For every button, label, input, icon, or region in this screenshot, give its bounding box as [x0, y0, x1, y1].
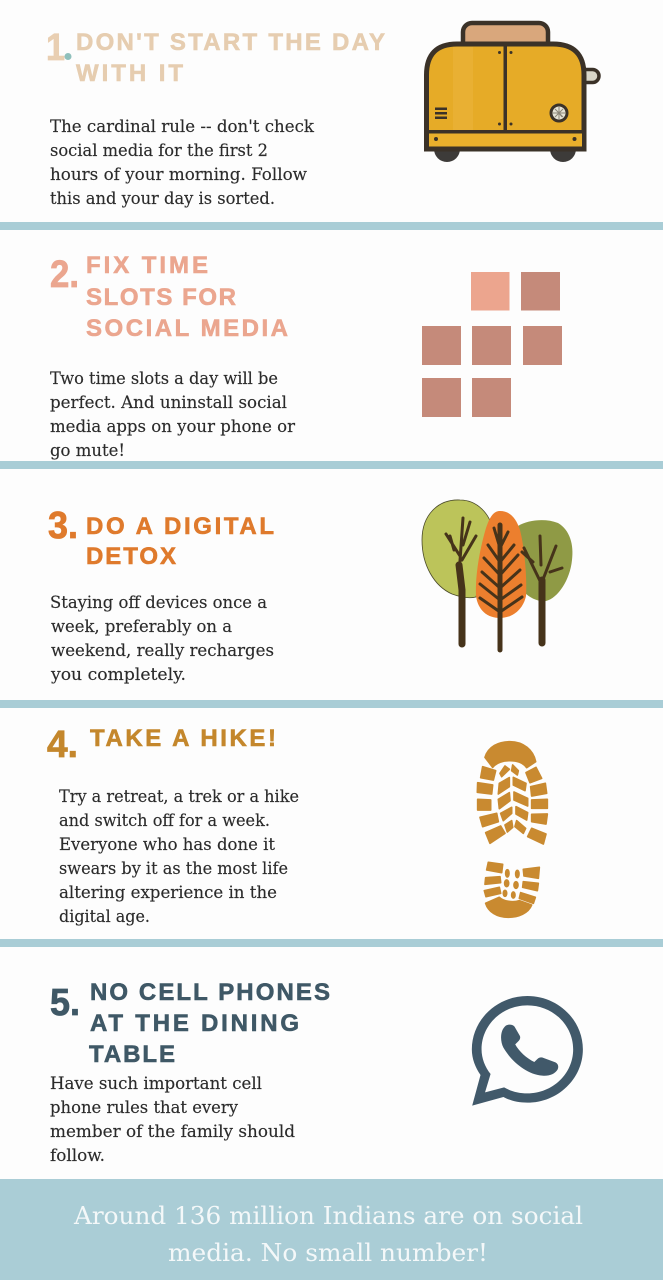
text: tip 1 body: this and your day is sorted. [50, 189, 275, 208]
text: tip 3 body: Staying off devices once a [50, 593, 267, 612]
text: tip 4 body: and switch off for a week. [59, 811, 270, 830]
heading: tip 3: DO A DIGITAL [86, 513, 274, 540]
heading: tip 5: TABLE [89, 1041, 175, 1068]
text: tip 4 body: digital age. [59, 907, 150, 926]
heading: tip 5: NO CELL PHONES [90, 979, 330, 1006]
panel: tip 3 [48, 500, 572, 684]
heading: tip 1 [46, 27, 385, 87]
text: tip 4 body: altering experience in the [59, 883, 277, 902]
text: tip 2 body: media apps on your phone or [50, 417, 295, 436]
panel: tip 2 [50, 252, 562, 460]
text: tip 4 body: Everyone who has done it [59, 835, 275, 854]
text: tip 5 body: member of the family should [50, 1122, 295, 1141]
panel: tip 5 [50, 979, 583, 1165]
text: tip 3 body: weekend, really recharges [51, 641, 274, 660]
heading: tip 5 [50, 979, 330, 1068]
text: tip 3 body: you completely. [50, 665, 186, 684]
heading: tip 1: DON'T START THE DAY [76, 29, 385, 56]
text: tip 4 body [59, 787, 299, 926]
text: tip 5 body: follow. [50, 1146, 105, 1165]
text: tip 1 body [50, 117, 315, 208]
heading: tip 1: WITH IT [76, 60, 183, 87]
heading: tip 5: AT THE DINING [90, 1010, 299, 1037]
text: tip 2 body: go mute! [50, 441, 125, 460]
heading: tip 4: 4. [47, 724, 78, 766]
footer banner: Around 136 million Indians are on social [73, 1201, 583, 1230]
text: tip 5 body [50, 1074, 295, 1165]
footer banner: media. No small number! [168, 1238, 488, 1267]
icon: three trees [422, 500, 572, 650]
heading: tip 5: 5. [50, 982, 80, 1024]
text: tip 3 body: week, preferably on a [51, 617, 232, 636]
heading: tip 4: TAKE A HIKE! [90, 725, 276, 752]
heading: tip 1: 1 [46, 27, 65, 69]
text: tip 1 body: The cardinal rule -- don't check [50, 117, 315, 136]
panel: tip 1 [46, 23, 599, 208]
footer banner [0, 1179, 663, 1280]
text: tip 2 body [50, 369, 295, 460]
text: tip 1 body: social media for the first 2 [50, 141, 268, 160]
heading: tip 4 [47, 724, 276, 766]
icon: grid of squares [422, 272, 562, 417]
panel: tip 4 [47, 724, 547, 926]
icon: toaster [426, 23, 599, 162]
icon: boot prints [477, 742, 547, 917]
icon: phone speech bubble [472, 996, 583, 1106]
heading: tip 3 [48, 505, 274, 570]
text: tip 1 body: hours of your morning. Follow [50, 165, 307, 184]
text: tip 3 body [50, 593, 274, 684]
heading: tip 2: SLOTS FOR [86, 284, 236, 311]
heading: tip 2 [50, 252, 288, 342]
text: tip 5 body: phone rules that every [50, 1098, 239, 1117]
heading: tip 3: DETOX [86, 543, 176, 570]
text: tip 2 body: Two time slots a day will be [50, 369, 278, 388]
heading: tip 3: 3. [48, 505, 78, 547]
text: tip 4 body: swears by it as the most life [59, 859, 288, 878]
heading: tip 2: SOCIAL MEDIA [86, 315, 288, 342]
heading: tip 2: 2. [50, 254, 79, 296]
text: tip 4 body: Try a retreat, a trek or a hike [59, 787, 299, 806]
heading: tip 2: FIX TIME [86, 252, 208, 279]
text: tip 2 body: perfect. And uninstall social [50, 393, 287, 412]
text: tip 5 body: Have such important cell [50, 1074, 262, 1093]
